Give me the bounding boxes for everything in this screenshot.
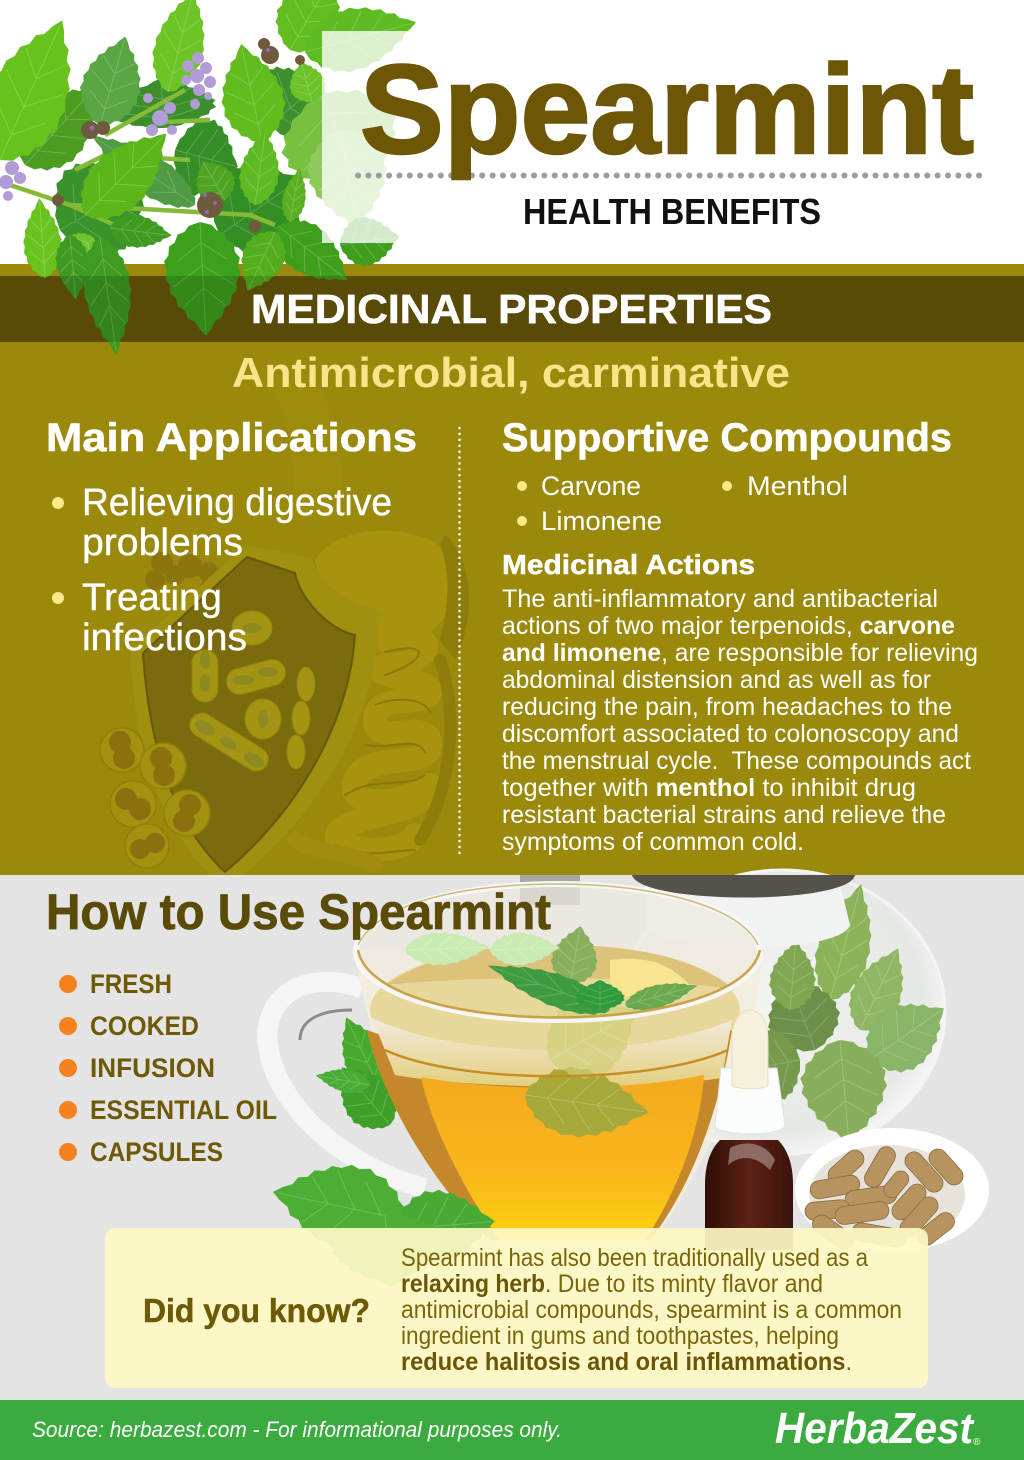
pale mint tips behind rim xyxy=(404,931,491,966)
image: mint sprig with purple flowers xyxy=(0,0,424,358)
text block: medicinal actions: abdominal distension and as well as for xyxy=(502,666,931,694)
translucent white panel behind title xyxy=(322,31,417,243)
heading: how to use: How to Use Spearmint xyxy=(46,884,551,940)
bacteria xyxy=(109,731,201,859)
faint throat shape xyxy=(250,370,343,520)
heading: Main Applications xyxy=(46,416,417,460)
mint leaves behind cup xyxy=(327,1008,399,1099)
subheading: medicinal actions: Medicinal Actions xyxy=(502,549,755,580)
list item: infections xyxy=(52,577,247,659)
purple flower clusters xyxy=(0,52,216,201)
shield xyxy=(130,545,380,890)
stems xyxy=(10,90,275,225)
item: essential oil: ESSENTIAL OIL xyxy=(90,1095,277,1125)
tea liquid side xyxy=(367,1030,732,1240)
image: essential oil dropper bottle xyxy=(705,1010,793,1250)
list: uses xyxy=(59,969,277,1167)
text block: medicinal actions: resistant bacterial strains and relieve the xyxy=(502,801,946,829)
stomach and organs xyxy=(315,531,456,642)
intestines xyxy=(295,637,450,865)
logo: HerbaZest: HerbaZest xyxy=(775,1404,975,1453)
item: fresh xyxy=(59,969,172,999)
image: mint leaf in foreground xyxy=(264,1150,498,1292)
mint on tea surface xyxy=(547,922,603,989)
lower leaves xyxy=(20,197,64,279)
callout text: relaxing herb. Due to its minty flavor and xyxy=(401,1270,823,1298)
text block: medicinal actions: together with menthol to inhibit drug xyxy=(502,774,916,802)
image: bowl of capsules xyxy=(795,1128,989,1253)
list item: digestive: problems xyxy=(82,522,243,564)
footer xyxy=(0,1400,1024,1460)
compound list: Carvone xyxy=(541,471,641,501)
panel: how to use background xyxy=(0,875,1024,1400)
list item: infections: Treating xyxy=(82,577,222,619)
middle leaves xyxy=(80,119,206,221)
cup handle xyxy=(267,982,425,1188)
callout heading: Did you know? xyxy=(143,1292,370,1329)
heading band: dark strip xyxy=(0,276,1024,342)
bacteria halos xyxy=(100,728,210,868)
text block: medicinal actions: and limonene, are responsible for relieving xyxy=(502,639,978,667)
list item: infections: infections xyxy=(82,617,247,659)
text block: medicinal actions xyxy=(502,585,978,856)
source note: Source: herbazest.com - For informational purposes only. xyxy=(32,1417,562,1442)
cells in shield xyxy=(185,611,315,775)
illustration: digestive system with shield and bacteria xyxy=(100,370,469,890)
image: cup of spearmint tea xyxy=(267,882,762,1245)
text block: medicinal actions: reducing the pain, from headaches to the xyxy=(502,693,952,721)
text block: medicinal actions: actions of two major terpenoids, carvone xyxy=(502,612,955,640)
list item: digestive: Relieving digestive xyxy=(82,482,392,524)
cup rims xyxy=(356,884,760,1020)
heading: Supportive Compounds xyxy=(502,416,952,460)
text block: medicinal actions: The anti-inflammatory and antibacterial xyxy=(502,585,938,613)
callout text: Spearmint has also been traditionally used as a xyxy=(401,1244,868,1272)
callout text: antimicrobial compounds, spearmint is a common xyxy=(401,1296,902,1324)
item: cooked: COOKED xyxy=(90,1011,199,1041)
callout text xyxy=(401,1244,902,1376)
heading band: shade over leaves xyxy=(0,276,1024,342)
callout: did you know xyxy=(105,1228,928,1388)
text block: medicinal actions: symptoms of common cold. xyxy=(502,828,804,856)
item: capsules: CAPSULES xyxy=(90,1137,223,1167)
compound list: Limonene xyxy=(541,506,662,536)
logo: HerbaZest: ® xyxy=(973,1437,981,1448)
compound list: Menthol xyxy=(747,471,848,501)
callout text: ingredient in gums and toothpastes, helping xyxy=(401,1322,839,1350)
title: Spearmint xyxy=(360,39,974,180)
panel: medicinal properties background xyxy=(0,264,1024,875)
upper leaves xyxy=(0,4,98,176)
text block: medicinal actions: discomfort associated to colonoscopy and xyxy=(502,720,959,748)
item: fresh: FRESH xyxy=(90,969,172,999)
fat globules xyxy=(145,552,236,601)
item: infusion: INFUSION xyxy=(90,1053,215,1083)
leaf in tea xyxy=(520,1061,654,1147)
list item: digestive xyxy=(52,482,392,564)
back leaves xyxy=(0,65,120,187)
cup glass xyxy=(355,950,762,1245)
image: glass teapot with mint leaves xyxy=(520,870,963,1154)
subtitle: HEALTH BENEFITS xyxy=(523,191,821,232)
callout text: reduce halitosis and oral inflammations. xyxy=(401,1348,852,1376)
text block: medicinal actions: the menstrual cycle. These compounds act xyxy=(502,747,971,775)
heading: medicinal properties: MEDICINAL PROPERTIES xyxy=(251,286,772,332)
tea surface xyxy=(370,945,740,1075)
page background: white header xyxy=(0,0,1024,264)
subheading: properties: Antimicrobial, carminative xyxy=(232,349,790,396)
dotted rule under title xyxy=(358,172,982,178)
panel: supportive compounds xyxy=(502,416,978,856)
panel: main applications xyxy=(46,416,417,659)
compound list xyxy=(517,471,848,536)
